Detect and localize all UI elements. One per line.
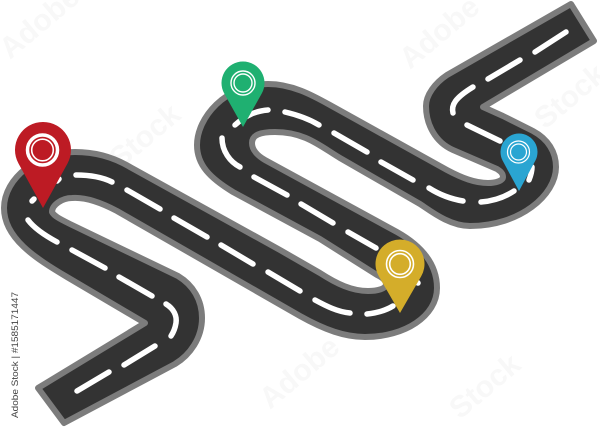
pin: red	[15, 122, 71, 208]
pin: blue	[501, 134, 538, 191]
watermarks: Stock	[103, 97, 187, 175]
pin: yellow	[376, 239, 424, 313]
pin: green	[222, 61, 264, 127]
watermarks: Stock	[443, 347, 527, 425]
lane dashes	[28, 32, 566, 391]
stock credit: Adobe Stock | #1585171447	[10, 292, 21, 418]
watermarks: Adobe	[253, 330, 346, 415]
